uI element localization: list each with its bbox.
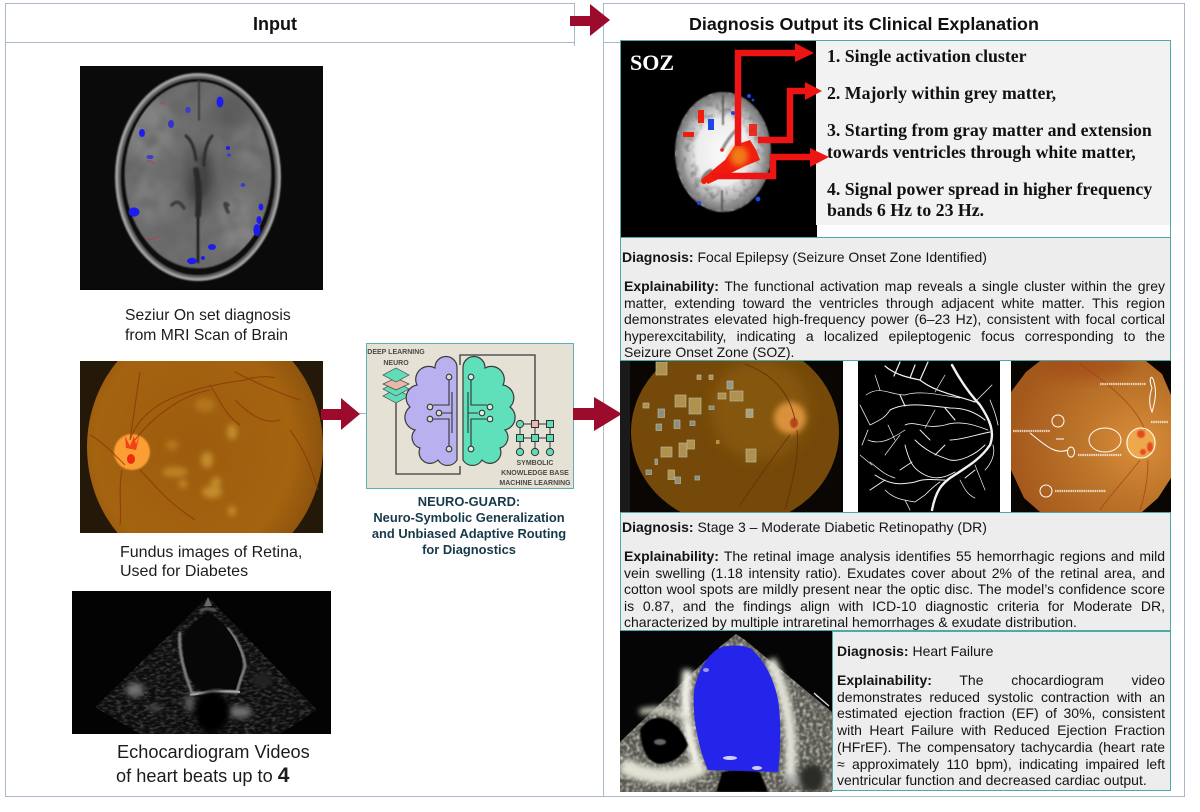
panel: heart failure diagnosis text: demonstrates reduced systolic contraction with an: [837, 689, 1165, 705]
caption: MRI: from MRI Scan of Brain: [125, 327, 288, 344]
panel: retinopathy diagnosis text: Diagnosis: Stage 3 – Moderate Diabetic Retinopathy (DR): [622, 519, 987, 535]
label: deep learning: KNOWLEDGE BASE: [501, 470, 569, 477]
panel: epilepsy diagnosis text: Diagnosis: Focal Epilepsy (Seizure Onset Zone Identified): [622, 249, 987, 265]
panel: heart failure diagnosis text: [832, 631, 1171, 791]
icon: green brain lobe: [463, 356, 515, 465]
findings list: towards ventricles through white matter,: [827, 142, 1136, 162]
caption: NEURO-GUARD model: Neuro-Symbolic Generalization: [373, 510, 565, 525]
panel: heart failure diagnosis text: estimated ejection fraction (EF) of 30%, consistent: [837, 705, 1165, 721]
caption: echocardiogram: [116, 742, 310, 787]
caption: echocardiogram: Echocardiogram Videos: [117, 742, 310, 762]
image: segmented retinal vessels: [858, 361, 1000, 512]
caption: MRI: [125, 307, 291, 344]
panel: epilepsy diagnosis text: [620, 237, 1171, 361]
findings list: 4. Signal power spread in higher frequency: [827, 179, 1152, 199]
panel: heart failure diagnosis text: Diagnosis: Heart Failure: [837, 643, 993, 659]
arrowheads overlapping findings: [795, 43, 829, 167]
panel: epilepsy diagnosis text: matter, extending toward the ventricles through adjacent white matter. This region: [624, 294, 1165, 310]
caption: fundus: Used for Diabetes: [120, 563, 248, 580]
image: brain MRI scan: [80, 66, 323, 290]
image: annotated fundus: [1011, 361, 1171, 512]
heading: diagnosis output: Diagnosis Output its Clinical Explanation: [689, 14, 1039, 34]
image: retina fundus: [80, 361, 323, 533]
findings list: 2. Majorly within grey matter,: [827, 83, 1056, 103]
image: echocardiogram input: [72, 591, 331, 734]
label: deep learning: MACHINE LEARNING: [499, 480, 571, 487]
arrow: model to output: [573, 397, 620, 431]
label: deep learning: DEEP LEARNING: [367, 349, 425, 356]
panel: heart failure diagnosis text: Explainability: The chocardiogram video: [837, 672, 1165, 688]
findings list: 3. Starting from gray matter and extension: [827, 120, 1152, 140]
caption: echocardiogram: of heart beats up to 4: [116, 764, 289, 787]
icon: purple brain lobe: [405, 356, 457, 465]
panel: heart failure diagnosis text: with Heart Failure with Reduced Ejection Fraction: [837, 722, 1165, 738]
image: fundus with exudate boxes: [620, 361, 843, 512]
panel: retinopathy diagnosis text: Explainability: The retinal image analysis identifies 55 hemorrhagic regions and mild: [624, 548, 1165, 564]
arrow: input to model: [321, 398, 360, 430]
arrow: input to output header: [570, 4, 610, 36]
SOZ label: SOZ: [630, 50, 674, 75]
caption: MRI: Seziur On set diagnosis: [125, 307, 291, 324]
left panel frame: input: [5, 3, 575, 796]
connector lines: [396, 355, 535, 474]
caption: NEURO-GUARD model: NEURO-GUARD:: [418, 494, 520, 509]
panel: epilepsy diagnosis text: hyperexcitability, indicating a localized epileptogenic focus corresponding to the: [624, 328, 1165, 344]
caption: NEURO-GUARD model: for Diagnostics: [422, 542, 516, 557]
caption: NEURO-GUARD model: and Unbiased Adaptive Routing: [372, 526, 566, 541]
heading: input: Input: [253, 14, 297, 34]
connector line to model box: [358, 413, 367, 414]
icon: layer stack: [383, 368, 409, 403]
icon: symbolic graph: [516, 420, 554, 456]
caption: fundus: Fundus images of Retina,: [120, 544, 302, 561]
panel: seizure finding list: [620, 40, 1171, 238]
diagram: neuro-symbolic model: [366, 343, 574, 489]
panel: heart failure diagnosis text: (HFrEF). The compensatory tachycardia (heart rate: [837, 739, 1165, 755]
panel: heart failure diagnosis text: ≈ approximately 110 bpm), indicating impaired left: [837, 756, 1165, 772]
label: deep learning: NEURO: [383, 360, 409, 367]
panel: retinopathy diagnosis text: is 0.87, and the findings align with ICD-10 diagnostic criteria for Moderate DR,: [624, 598, 1165, 614]
SOZ brain map image: [621, 41, 817, 237]
brain circuitry: [433, 380, 487, 446]
panel: epilepsy diagnosis text: Explainability: The functional activation map reveals a single cluster within the grey: [624, 278, 1165, 294]
findings list: bands 6 Hz to 23 Hz.: [827, 200, 984, 220]
panel: epilepsy diagnosis text: demonstrates elevated high-frequency power (6–23 Hz), consistent with focal cortical: [624, 311, 1165, 327]
panel: retinopathy diagnosis text: cotton wool spots are mildly present near the optic disc. The model’s confidence score: [624, 581, 1165, 597]
panel: heart failure diagnosis text: ventricular function and decreased cardiac output.: [837, 772, 1147, 788]
caption: fundus: [120, 544, 302, 580]
panel: epilepsy diagnosis text: Seizure Onset Zone (SOZ).: [624, 344, 794, 360]
image: segmented echocardiogram: [620, 631, 832, 792]
label: deep learning: SYMBOLIC: [517, 460, 553, 467]
label: deep learning: [367, 349, 571, 487]
panel: retinopathy diagnosis text: characterized by multiple intraretinal hemorrhages & exudate distribution.: [624, 614, 1077, 630]
findings list: [816, 41, 1170, 225]
panel: retinopathy diagnosis text: vein swelling (1.18 intensity ratio). Exudates cover about 2% of the retinal area, and: [624, 564, 1165, 580]
findings list: 1. Single activation cluster: [827, 46, 1027, 66]
right panel frame: output: [603, 3, 1185, 797]
caption: NEURO-GUARD model: [372, 494, 566, 557]
panel: retinopathy diagnosis text: [620, 512, 1171, 631]
